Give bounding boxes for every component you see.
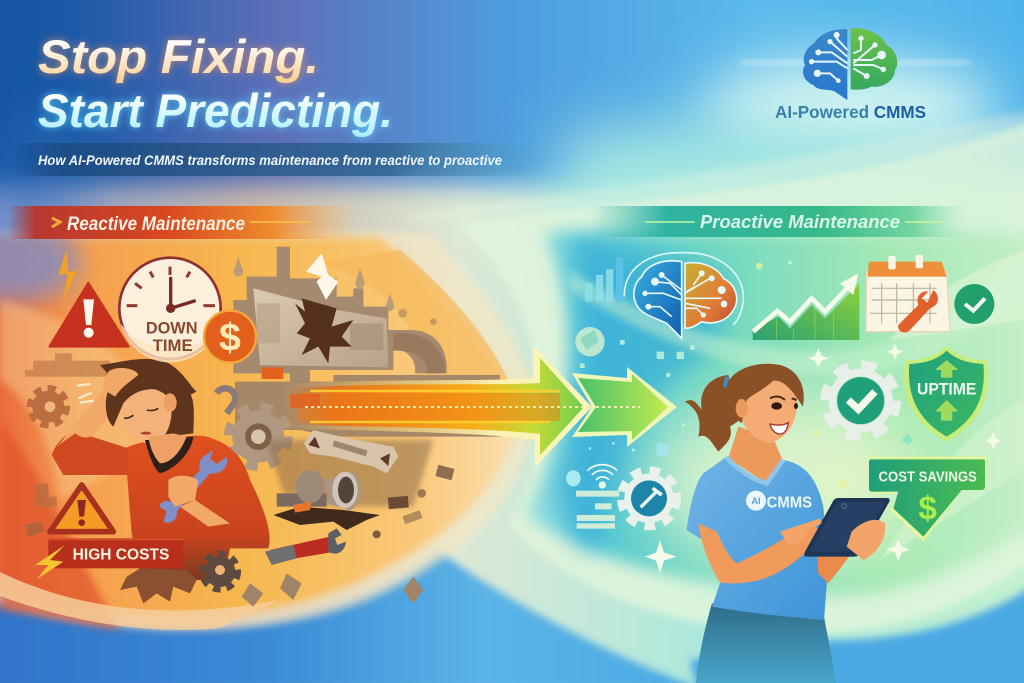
banner: Proactive Maintenance: Proactive Maintenance [700,212,900,232]
icon: settings gear [622,472,676,525]
icon: bar chart [585,257,623,302]
icon: broken parts [267,430,455,538]
icon: small gear [30,389,66,425]
neck [728,427,783,483]
chevron [52,218,60,227]
icon: small wrench [217,388,235,413]
hair front [100,359,197,427]
icon: clock [119,258,221,362]
face [737,379,797,443]
platform [235,375,500,437]
icon: cost savings tag [868,457,987,542]
shirt text [746,491,812,511]
left illustration [25,247,500,607]
title [38,30,393,137]
icon: dollar coin [204,311,256,363]
wave streaks [410,110,1024,222]
title: Start Predicting. [38,84,393,137]
forearm [180,500,230,527]
logo glow [740,60,970,65]
raised arm sleeve [52,431,128,475]
banner: Reactive Maintenance: Reactive Maintenance [67,213,245,235]
icon: spark [306,253,338,300]
icon: red wrench [265,528,346,565]
icon: clock: DOWN [146,318,197,337]
panel: reactive lens background [0,222,538,630]
icon: tablet [804,498,890,557]
icon: check circle [954,284,994,324]
face lines [124,408,158,418]
icon: dollar coin: $ [219,316,241,360]
high costs banner [48,538,183,568]
woman: confident with tablet [685,364,890,683]
woman: frustrated [52,359,270,580]
icon: AI brain [624,253,743,338]
head [120,387,171,444]
right illustration [566,253,1002,683]
subtitle band [10,143,550,176]
icon: lightning [58,250,77,300]
shirt debris [120,568,423,607]
icon: brain logo [803,28,897,100]
drops [234,257,394,311]
smile [770,423,788,434]
other arm [817,555,850,583]
icon: warning triangle [49,283,129,347]
ponytail [685,375,740,452]
arm skin [57,383,125,447]
jeans [696,603,836,683]
eyes [771,402,782,410]
icon: uptime shield: UPTIME [917,379,976,398]
shirt text: AI [751,496,761,506]
icon: check gear [826,366,895,435]
debris blocks left [25,522,44,537]
debris blocks [25,353,110,377]
panel: proactive lens background [455,120,1024,633]
icon: large gear [229,407,288,466]
icon: hex badge [575,327,605,356]
banner: Reactive Maintenance [8,206,360,239]
title: Start Predicting. [38,84,393,137]
title: Stop Fixing. [38,30,319,83]
subtitle: How AI-Powered CMMS transforms maintenance from reactive to proactive [38,152,502,168]
icon: clock: TIME [153,336,193,355]
title: Stop Fixing. [38,30,319,83]
high costs banner: HIGH COSTS [73,546,170,563]
hands [780,518,822,545]
left arm skin [698,522,827,584]
icon: calendar [866,255,950,332]
bottom blue [0,552,705,683]
marks [77,384,94,403]
icon: cost savings tag: COST SAVINGS [878,470,977,486]
arrow: green [572,367,677,447]
icon: growth chart [753,273,859,340]
shirt text: CMMS [767,494,812,511]
icon: machine [233,247,447,383]
icon: warning outline [50,485,113,532]
icon: yellow lightning [35,545,65,579]
hair back [133,364,194,437]
sparkles [645,343,1002,573]
hair [727,364,804,423]
icon: uptime shield [904,346,988,442]
t-shirt [687,457,828,620]
arrow: orange to green transition [280,345,677,467]
data particles [580,261,846,487]
logo wordmark: AI-Powered CMMS [775,102,926,122]
crack [295,298,353,363]
torso [125,436,270,580]
icon: held wrench [159,450,227,523]
banner: Proactive Maintenance [590,206,970,237]
hand on head [102,368,138,397]
logo: AI-Powered CMMS [740,28,970,122]
bottom dark gear [203,554,237,589]
icon: wifi and stack [566,465,619,529]
icon: cost savings tag: $ [918,490,937,527]
